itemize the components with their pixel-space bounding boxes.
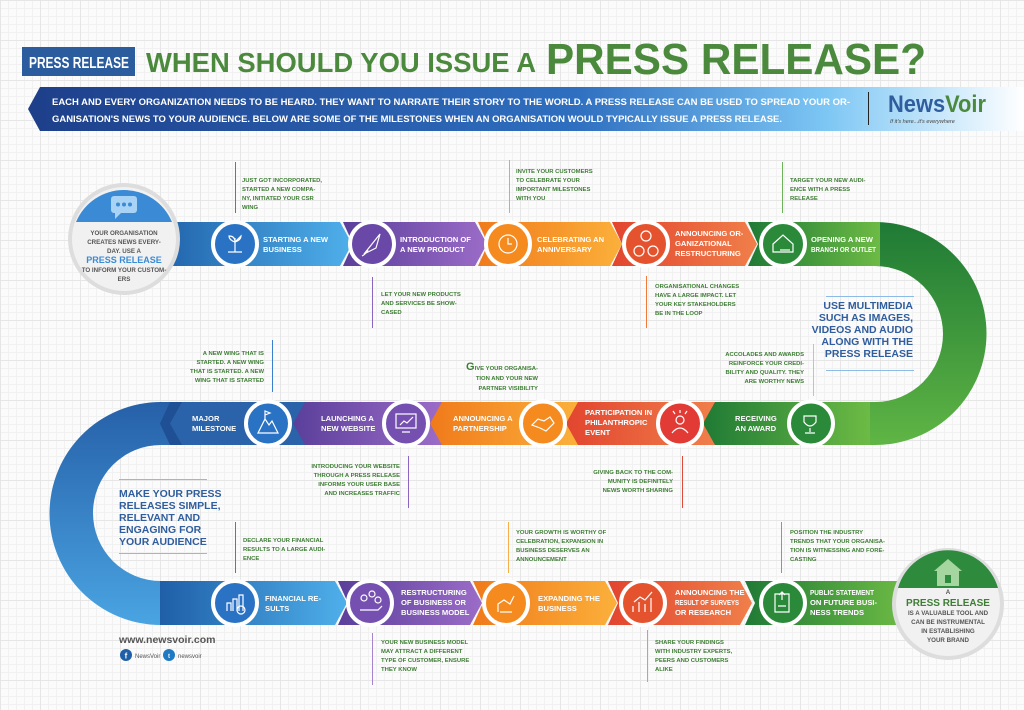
title badge: PRESS RELEASE [22, 47, 135, 76]
row 2 labels: EVENT [585, 428, 611, 437]
end circle [892, 548, 1004, 660]
row 2 labels: RECEIVING [735, 414, 777, 423]
callout: branch [782, 162, 866, 213]
callout: business model: YOUR NEW BUSINESS MODEL [381, 640, 468, 646]
icon: house [934, 559, 962, 586]
callout: new business: STARTED A NEW COMPA- [242, 187, 315, 193]
end circle: IN ESTABLISHING [921, 628, 975, 635]
row 2 labels: ANNOUNCING A [453, 414, 513, 423]
start circle [68, 183, 180, 295]
callout: award: ARE WORTHY NEWS [745, 379, 804, 385]
row 2 labels: PHILANTHROPIC [585, 418, 648, 427]
tip: simple relevant [119, 479, 222, 554]
row 1 labels: BRANCH OR OUTLET [811, 245, 876, 254]
title: PRESS RELEASE? [546, 35, 926, 84]
callout: financial: RESULTS TO A LARGE AUDI- [243, 547, 325, 553]
row 2 labels: MAJOR [192, 414, 220, 423]
intro banner: EACH AND EVERY ORGANIZATION NEEDS TO BE HEARD. THEY WANT TO NARRATE THEIR STORY TO THE WORLD. A PRESS RELEASE CAN BE USED TO SPREAD YOUR OR- [52, 96, 850, 107]
end circle: PRESS RELEASE [906, 598, 990, 609]
intro banner: GANISATION'S NEWS TO YOUR AUDIENCE. BELOW ARE SOME OF THE MILESTONES WHEN AN ORGANISATION WOULD TYPICALLY ISSUE A PRESS RELEASE. [52, 113, 782, 124]
icon: chat bubble [111, 196, 137, 219]
row 1 labels: GANIZATIONAL [675, 239, 732, 248]
tip: simple relevant: MAKE YOUR PRESS [119, 488, 222, 500]
callout: financial: DECLARE YOUR FINANCIAL [243, 538, 324, 544]
row 1 labels: INTRODUCTION OF [400, 235, 471, 244]
row 1 ribbon [150, 222, 880, 266]
callout: business model: MAY ATTRACT A DIFFERENT [381, 649, 463, 655]
callout: financial: ENCE [243, 556, 259, 562]
end circle: YOUR BRAND [927, 637, 969, 644]
end circle: IS A VALUABLE TOOL AND [908, 610, 989, 617]
callout: public statement: POSITION THE INDUSTRY [790, 530, 863, 536]
start circle: CREATES NEWS EVERY- [87, 239, 161, 246]
callout: philanthropic: NEWS WORTH SHARING [603, 488, 673, 494]
tip: multimedia: SUCH AS IMAGES, [819, 312, 913, 324]
footer: website and social: newsvoir [178, 654, 202, 660]
tip: multimedia [812, 296, 914, 371]
callout: partnership: TION AND YOUR NEW [476, 376, 538, 382]
row 3 labels: OF BUSINESS OR [401, 598, 466, 607]
tip: simple relevant: RELEASES SIMPLE, [119, 500, 221, 512]
start circle: YOUR ORGANISATION [90, 230, 158, 237]
callout: new product: CASED [381, 310, 402, 316]
callout: new business [235, 162, 322, 213]
callout: award: BILITY AND QUALITY. THEY [725, 370, 804, 376]
callout: anniversary: TO CELEBRATE YOUR [516, 178, 581, 184]
start circle: ERS [118, 276, 130, 283]
callout: anniversary: WITH YOU [516, 196, 545, 202]
callout: milestone [190, 340, 273, 392]
tip: multimedia: USE MULTIMEDIA [823, 300, 913, 312]
logo: NewsVoir: NewsVoir [888, 91, 986, 118]
footer: website and social: t [168, 654, 170, 660]
row 2 labels: PARTICIPATION IN [585, 408, 652, 417]
row 2 labels: AN AWARD [735, 424, 777, 433]
title badge: PRESS RELEASE: PRESS RELEASE [29, 55, 129, 72]
row 3 labels: PUBLIC STATEMENT [810, 588, 874, 597]
callout: anniversary: IMPORTANT MILESTONES [516, 187, 590, 193]
callout: new product: LET YOUR NEW PRODUCTS [381, 292, 461, 298]
row 1 labels: A NEW PRODUCT [400, 245, 465, 254]
footer: website and social [118, 634, 215, 661]
callout: website [311, 456, 409, 508]
title: WHEN SHOULD YOU ISSUE A [146, 47, 536, 78]
callout: expanding: YOUR GROWTH IS WORTHY OF [516, 530, 607, 536]
callout: award: ACCOLADES AND AWARDS [725, 352, 804, 358]
callout: expanding [508, 522, 607, 573]
row 3 labels [265, 588, 878, 617]
callout: surveys [647, 630, 733, 682]
row 1 labels: OPENING A NEW [811, 235, 874, 244]
arc: right green [860, 222, 987, 445]
start circle: DAY. USE A [107, 248, 141, 255]
tip: simple relevant: YOUR AUDIENCE [119, 536, 207, 548]
footer: website and social: www.newsvoir.com [118, 634, 215, 646]
row 3 ribbon [160, 581, 905, 625]
end circle: CAN BE INSTRUMENTAL [911, 619, 985, 626]
callout: partnership: GIVE YOUR ORGANISA- [466, 361, 538, 373]
callout: restructuring: YOUR KEY STAKEHOLDERS [655, 302, 736, 308]
callout: partnership: PARTNER VISIBILITY [479, 386, 538, 392]
node circles row 2 [246, 402, 833, 446]
callout: restructuring: ORGANISATIONAL CHANGES [655, 284, 739, 290]
intro banner [28, 87, 1024, 131]
callout: new business: WING [242, 205, 258, 211]
callout: website: AND INCREASES TRAFFIC [324, 491, 401, 497]
row 3 labels: NESS TRENDS [810, 608, 864, 617]
callout: branch: TARGET YOUR NEW AUDI- [790, 178, 866, 184]
row 1 labels: CELEBRATING AN [537, 235, 604, 244]
row 1 labels: STARTING A NEW [263, 235, 329, 244]
callout: public statement: TRENDS THAT YOUR ORGANISA- [790, 539, 885, 545]
start circle: PRESS RELEASE [86, 255, 162, 265]
end circle: A [946, 589, 951, 596]
row 2 labels: MILESTONE [192, 424, 236, 433]
callout: philanthropic [593, 456, 683, 508]
callout: public statement: TION IS WITNESSING AND FORE- [790, 548, 884, 554]
row 2 labels [192, 408, 777, 437]
callout: milestone: A NEW WING THAT IS [203, 351, 264, 357]
callout: anniversary [509, 160, 593, 213]
tip: multimedia: VIDEOS AND AUDIO [812, 324, 913, 336]
callout: new product [372, 277, 461, 328]
callout: philanthropic: GIVING BACK TO THE COM- [593, 470, 673, 476]
callout: public statement [781, 522, 885, 573]
callout: award: REINFORCE YOUR CREDI- [729, 361, 804, 367]
tip: simple relevant: ENGAGING FOR [119, 524, 202, 536]
tip: multimedia: PRESS RELEASE [825, 348, 913, 360]
row 1 labels: RESTRUCTURING [675, 249, 741, 258]
row 3 labels: BUSINESS MODEL [401, 608, 470, 617]
callout: milestone: WING THAT IS STARTED [195, 378, 264, 384]
callout: restructuring: BE IN THE LOOP [655, 311, 703, 317]
callout: expanding: CELEBRATION, EXPANSION IN [516, 539, 603, 545]
callout: milestone: THAT IS STARTED. A NEW [190, 369, 264, 375]
callout: award [725, 344, 814, 396]
callout: website: INTRODUCING YOUR WEBSITE [311, 464, 400, 470]
callout: new business: NY, INITIATED YOUR CSR [242, 196, 315, 202]
arc: left blue [50, 402, 175, 625]
footer: website and social: f [125, 652, 128, 660]
row 3 labels: FINANCIAL RE- [265, 594, 321, 603]
row 1 labels: ANNOUNCING OR- [675, 229, 744, 238]
row 3 labels: OR RESEARCH [675, 608, 731, 617]
callout: new product: AND SERVICES BE SHOW- [381, 301, 457, 307]
row 1 labels: BUSINESS [263, 245, 302, 254]
row 2 labels: LAUNCHING A [321, 414, 374, 423]
callout: new business: JUST GOT INCORPORATED, [242, 178, 322, 184]
callout: public statement: CASTING [790, 557, 817, 563]
tip: multimedia: ALONG WITH THE [821, 336, 913, 348]
callout: surveys: ALIKE [655, 667, 673, 673]
callout: partnership [466, 361, 538, 392]
callout: branch: ENCE WITH A PRESS [790, 187, 850, 193]
callout: surveys: SHARE YOUR FINDINGS [655, 640, 724, 646]
callout: website: INFORMS YOUR USER BASE [318, 482, 400, 488]
node circles row 1 [213, 222, 805, 266]
callout: website: THROUGH A PRESS RELEASE [314, 473, 400, 479]
row 3 labels: SULTS [265, 604, 289, 613]
row 3 labels: ANNOUNCING THE [675, 588, 745, 597]
row 1 labels: ANNIVERSARY [537, 245, 592, 254]
row 3 labels: RESTRUCTURING [401, 588, 467, 597]
callout: surveys: WITH INDUSTRY EXPERTS, [655, 649, 733, 655]
tip: simple relevant: RELEVANT AND [119, 512, 200, 524]
row 3 labels: BUSINESS [538, 604, 577, 613]
logo: NewsVoir: If it's here...it's everywhere [890, 119, 955, 125]
node circles row 3 [213, 581, 805, 625]
callout: branch: RELEASE [790, 196, 818, 202]
start circle: TO INFORM YOUR CUSTOM- [82, 267, 166, 274]
row 2 labels: PARTNERSHIP [453, 424, 507, 433]
row 3 labels: ON FUTURE BUSI- [810, 598, 878, 607]
callout: milestone: STARTED. A NEW WING [196, 360, 264, 366]
row 1 labels [263, 229, 876, 258]
callout: business model: TYPE OF CUSTOMER, ENSURE [381, 658, 469, 664]
row 2 ribbon [160, 402, 870, 445]
callout: philanthropic: MUNITY IS DEFINITELY [608, 479, 673, 485]
callout: surveys: PEERS AND CUSTOMERS [655, 658, 728, 664]
callout: expanding: ANNOUNCEMENT [516, 557, 567, 563]
title [146, 35, 926, 84]
callout: anniversary: INVITE YOUR CUSTOMERS [516, 169, 593, 175]
row 2 labels: NEW WEBSITE [321, 424, 375, 433]
row 3 labels: EXPANDING THE [538, 594, 600, 603]
callout: restructuring [646, 276, 739, 328]
callout: business model: THEY KNOW [381, 667, 417, 673]
callout: business model [372, 633, 469, 685]
icon glyphs [227, 231, 816, 614]
callout: expanding: BUSINESS DESERVES AN [516, 548, 590, 554]
row 3 labels: RESULT OF SURVEYS [675, 598, 739, 607]
footer: website and social: NewsVoir [135, 654, 160, 660]
callout: financial [235, 522, 325, 573]
callout: restructuring: HAVE A LARGE IMPACT. LET [655, 293, 737, 299]
